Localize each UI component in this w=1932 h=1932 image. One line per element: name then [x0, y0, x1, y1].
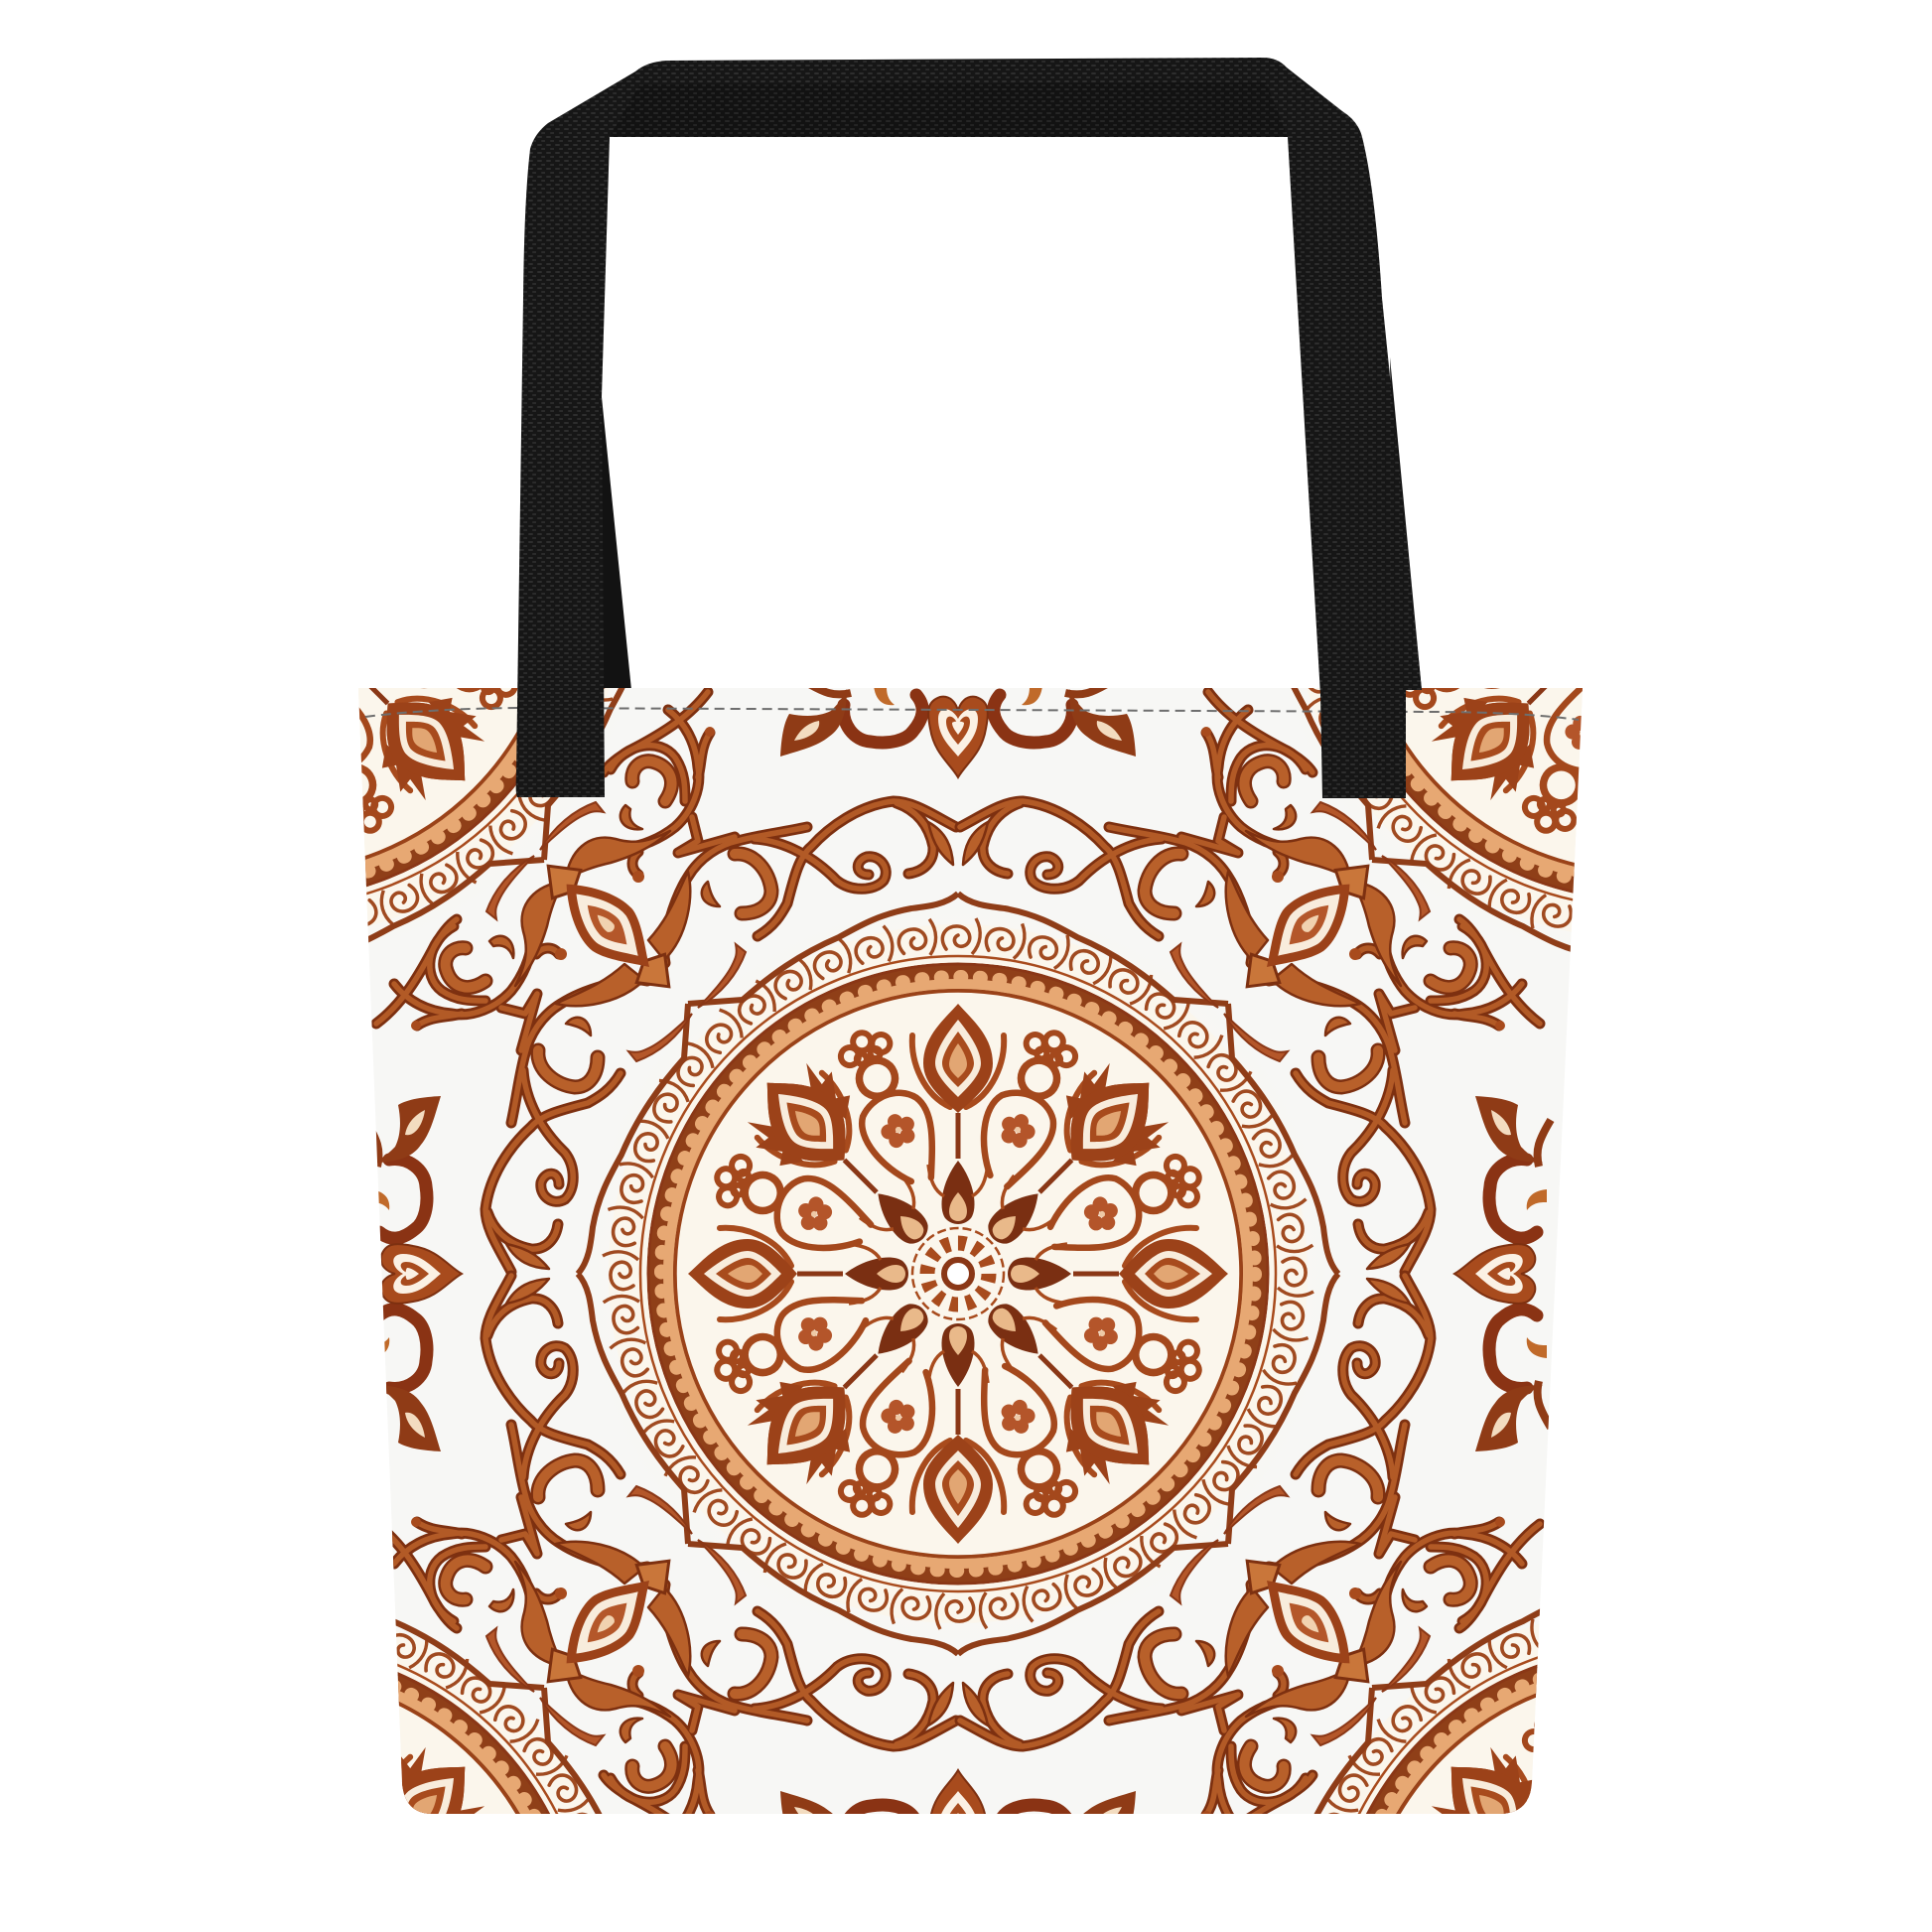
corner medallion: bottom right	[1311, 1608, 1541, 1814]
corner medallion: top right	[1291, 688, 1583, 952]
edge motif: right	[1454, 1096, 1551, 1451]
handle top band inner face	[610, 82, 1288, 137]
handle webbing	[516, 58, 1422, 798]
black handles	[516, 58, 1422, 798]
illustration: tote bag product photo	[358, 58, 1583, 1814]
corner medallion: top left	[358, 688, 625, 943]
scroll ornament wreath	[376, 692, 1540, 1856]
bag body	[358, 688, 1583, 1814]
edge motif: bottom	[780, 1768, 1136, 1814]
edge motif: top	[780, 681, 1136, 777]
top hem stitching	[365, 708, 1579, 720]
bag fabric	[338, 675, 1608, 1827]
corner medallion: bottom left	[395, 1618, 606, 1814]
central medallion	[576, 892, 1340, 1656]
edge motif: left	[365, 1096, 462, 1451]
back strap wedges	[601, 357, 1422, 690]
